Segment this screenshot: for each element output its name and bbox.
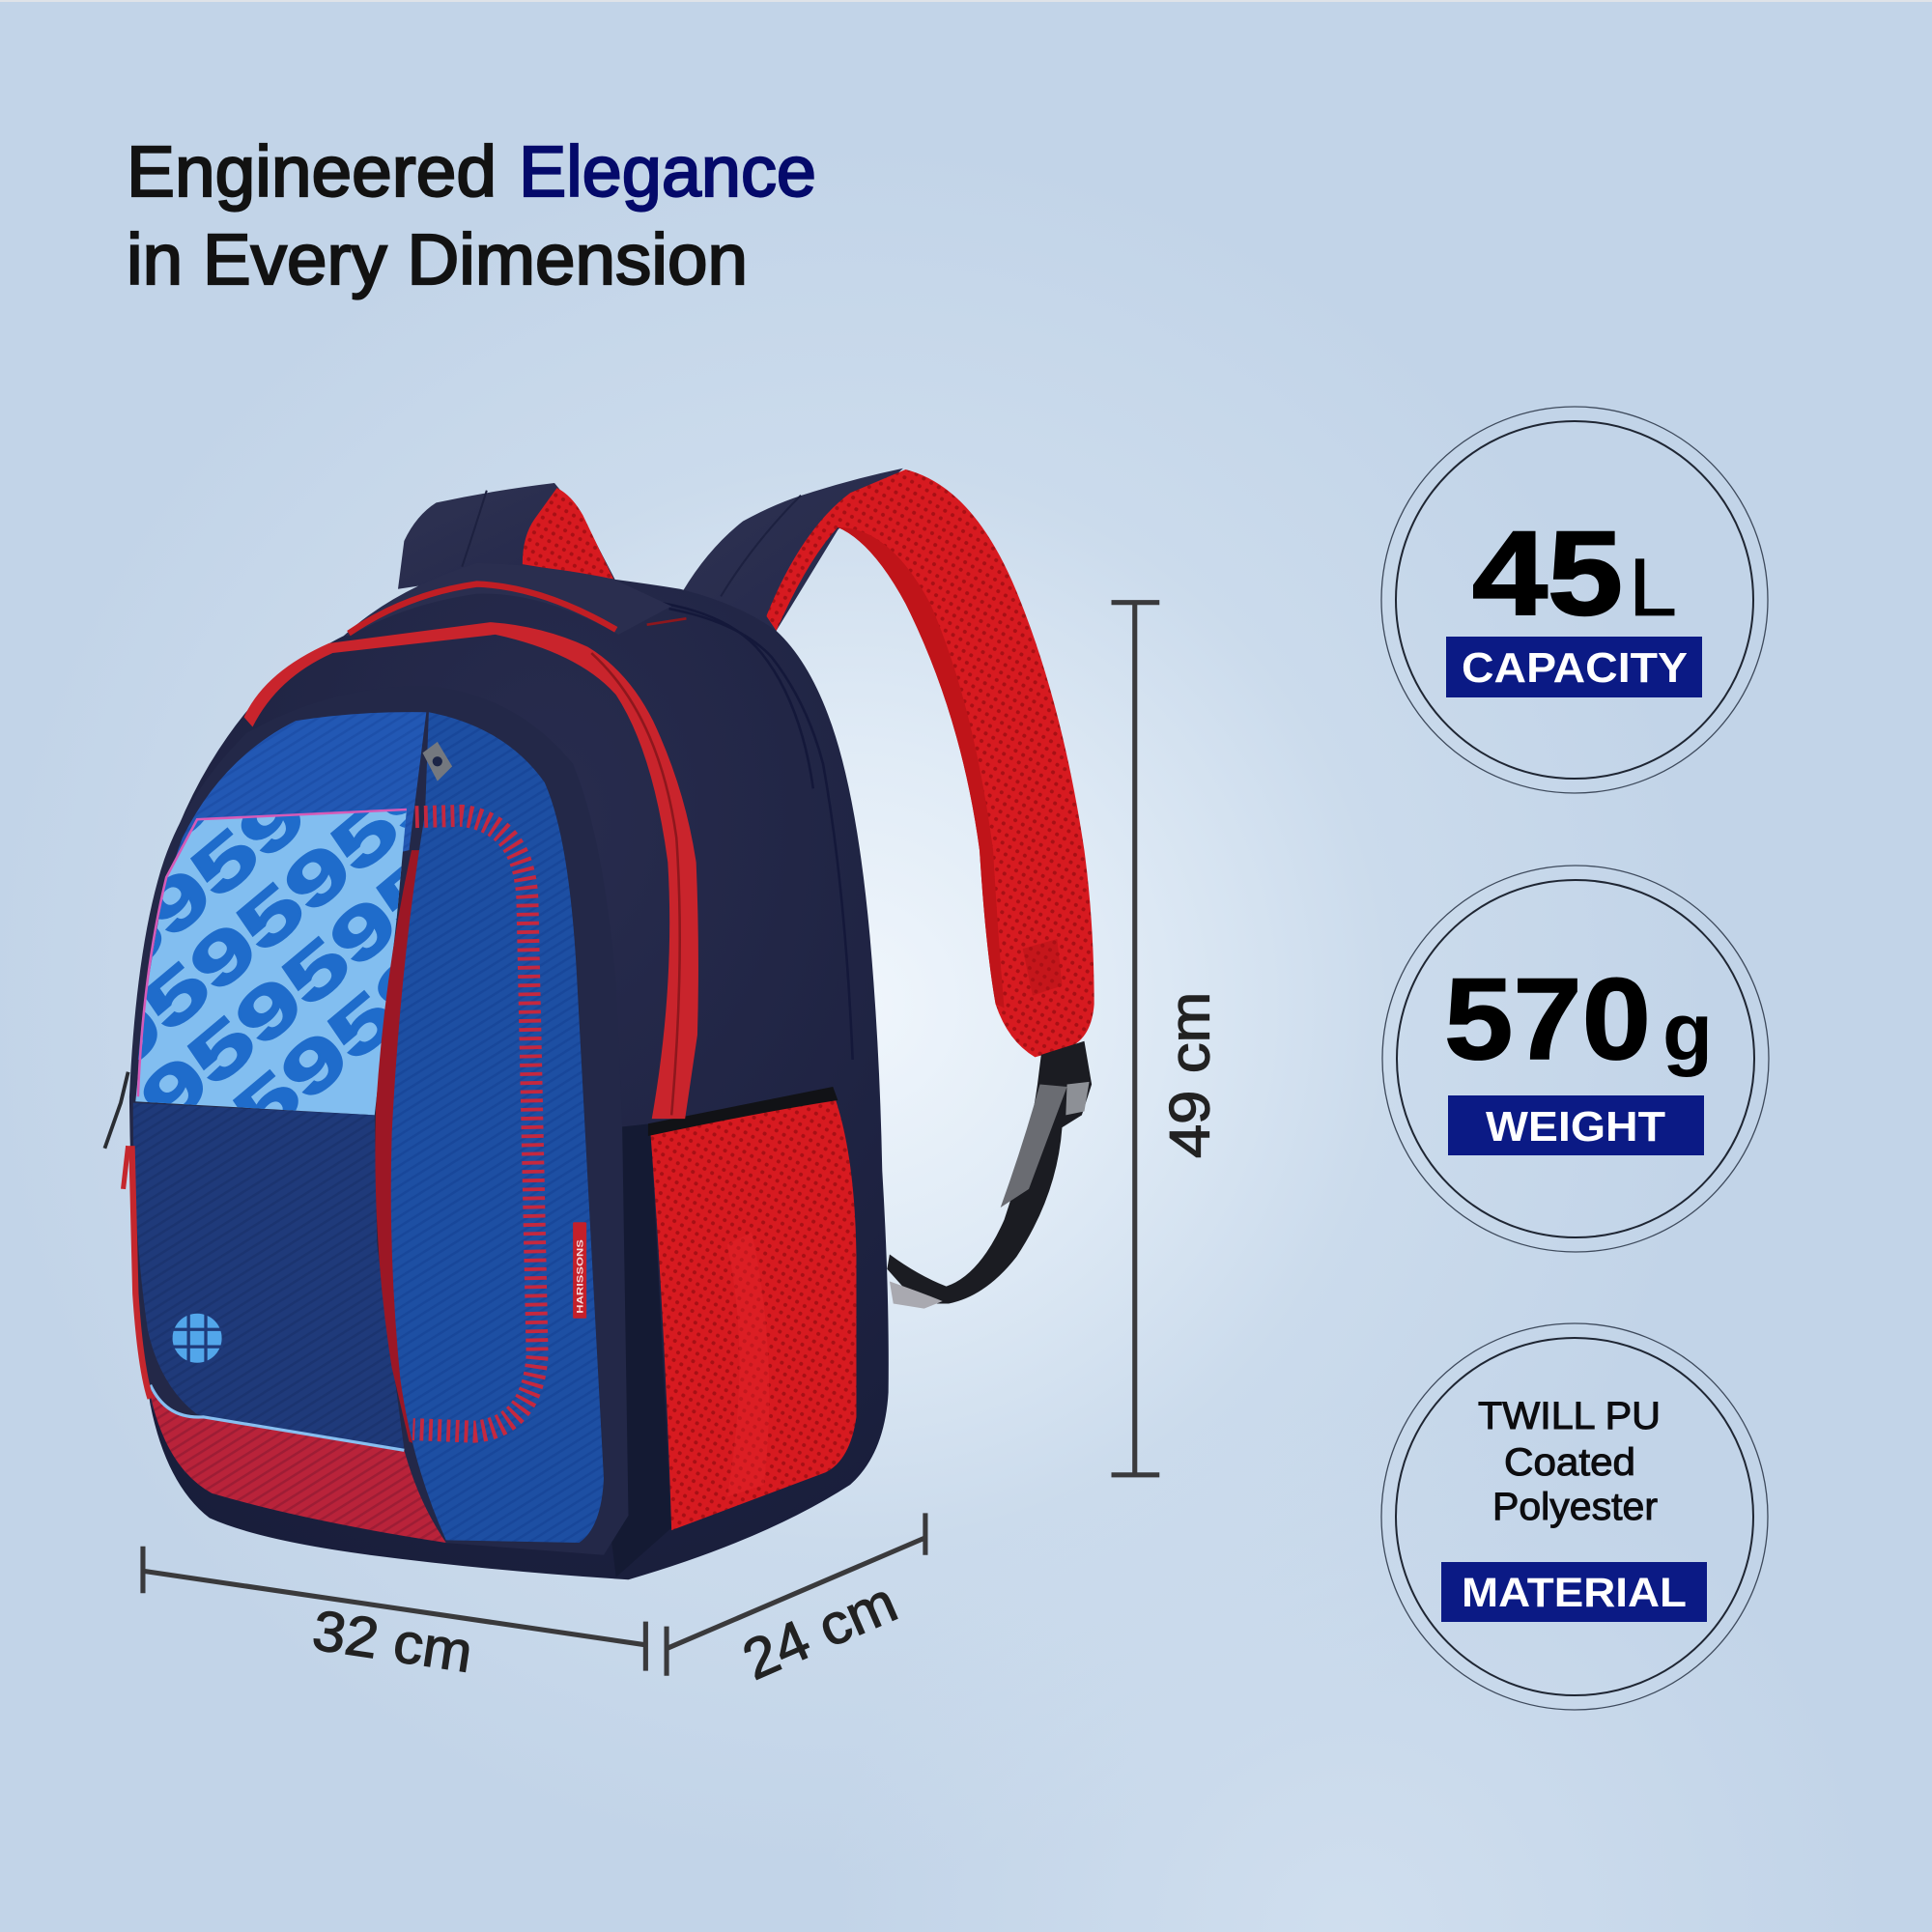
main body bbox=[133, 567, 889, 1579]
material description: Polyester bbox=[1492, 1486, 1658, 1528]
icon: round logo bbox=[171, 1311, 223, 1365]
width dimension: 32 cm: 32 cm bbox=[309, 1599, 476, 1685]
material description: TWILL PU bbox=[1478, 1395, 1661, 1437]
backpack illustration bbox=[0, 469, 1094, 1579]
capacity value: L bbox=[1629, 542, 1677, 633]
side zipper pull bbox=[104, 1072, 128, 1189]
weight label bbox=[1448, 1095, 1704, 1155]
patterned 59 panel bbox=[135, 808, 407, 1115]
front flap bbox=[391, 712, 604, 1543]
front pocket bright blue top bbox=[138, 712, 426, 1060]
body seams bbox=[640, 600, 853, 1060]
base piping bbox=[151, 1385, 404, 1450]
red inner seam bbox=[375, 850, 425, 1448]
capacity label: CAPACITY bbox=[1462, 644, 1688, 692]
depth dimension: 24 cm bbox=[667, 1513, 925, 1692]
right shoulder strap bbox=[683, 469, 1094, 1057]
side mesh pocket bbox=[648, 1087, 856, 1530]
front pocket navy lower panel bbox=[133, 1103, 404, 1449]
brand tag bbox=[573, 1222, 586, 1319]
zip puller bbox=[422, 742, 452, 781]
weight label: WEIGHT bbox=[1486, 1103, 1665, 1151]
side lower panel bbox=[582, 1123, 671, 1577]
front pocket border bbox=[129, 686, 629, 1555]
material label: MATERIAL bbox=[1462, 1570, 1687, 1616]
title: in Every Dimension bbox=[127, 219, 748, 299]
webbing strap bbox=[887, 1041, 1092, 1309]
red dashed track bbox=[412, 815, 537, 1432]
brand tag: HARISSONS bbox=[575, 1239, 584, 1314]
patterned 59 panel: 5959595959 bbox=[78, 723, 602, 1179]
title: Elegance bbox=[519, 131, 816, 212]
material label bbox=[1441, 1562, 1707, 1622]
weight value: g bbox=[1662, 986, 1713, 1077]
patterned 59 panel: 5959595959 bbox=[32, 668, 555, 1125]
red base panel bbox=[148, 1382, 446, 1543]
red edge trim bbox=[131, 1146, 151, 1399]
weight value: 570 bbox=[1444, 954, 1651, 1084]
capacity value: 45 bbox=[1472, 507, 1623, 640]
material description bbox=[1478, 1395, 1661, 1528]
title: Engineered bbox=[127, 131, 497, 212]
badge: capacity bbox=[1381, 407, 1768, 793]
width dimension: 32 cm bbox=[143, 1547, 645, 1685]
title bbox=[127, 131, 816, 299]
badge: weight bbox=[1382, 866, 1769, 1252]
red zipper trim bbox=[244, 622, 698, 1119]
top handle bbox=[344, 563, 686, 636]
capacity value bbox=[1472, 507, 1677, 640]
height dimension: 49 cm bbox=[1112, 603, 1221, 1475]
height dimension: 49 cm: 49 cm bbox=[1158, 992, 1221, 1158]
depth dimension: 24 cm: 24 cm bbox=[734, 1571, 906, 1692]
zipper line bbox=[591, 653, 680, 1115]
material description: Coated bbox=[1504, 1441, 1635, 1484]
capacity label bbox=[1446, 637, 1702, 697]
patterned 59 panel: 5959595959 bbox=[124, 777, 647, 1235]
left shoulder strap bbox=[398, 483, 616, 589]
badge: material bbox=[1381, 1323, 1768, 1710]
